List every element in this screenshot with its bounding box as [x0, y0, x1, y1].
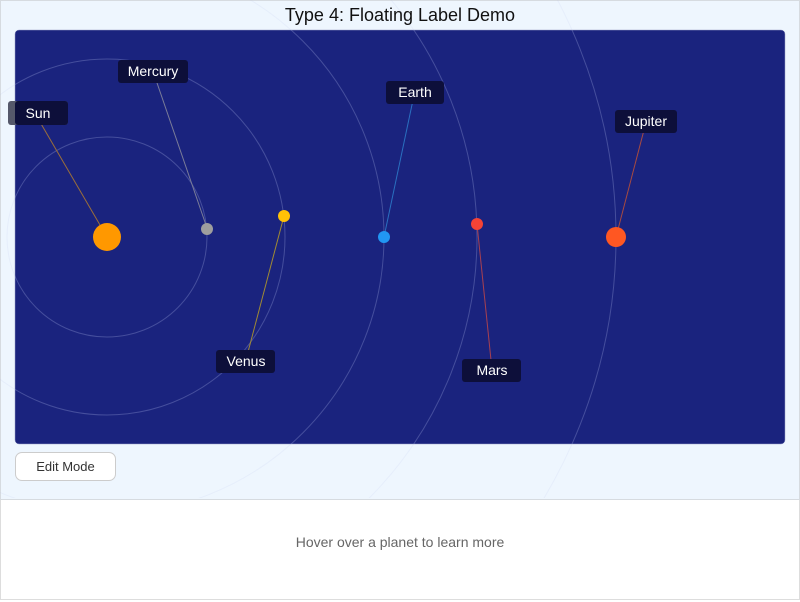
- labels: Mars: [476, 362, 508, 378]
- labels: Venus: [227, 353, 265, 369]
- labels: Mercury: [128, 63, 178, 79]
- button: edit mode: [15, 452, 116, 481]
- chart: solar system: [8, 11, 786, 444]
- labels: Earth: [398, 84, 432, 100]
- leader lines: [40, 80, 644, 360]
- planets: [93, 210, 626, 251]
- labels: Sun: [26, 105, 50, 121]
- labels: [8, 60, 677, 382]
- labels: Jupiter: [625, 113, 667, 129]
- info panel: [0, 500, 800, 600]
- hint text: Hover over a planet to learn more: [296, 534, 504, 550]
- title: Type 4: Floating Label Demo: [285, 5, 515, 25]
- button: edit mode: Edit Mode: [36, 459, 95, 474]
- orbits: [15, 30, 616, 444]
- faint outer orbits: [400, 11, 410, 24]
- panel background: [15, 30, 785, 444]
